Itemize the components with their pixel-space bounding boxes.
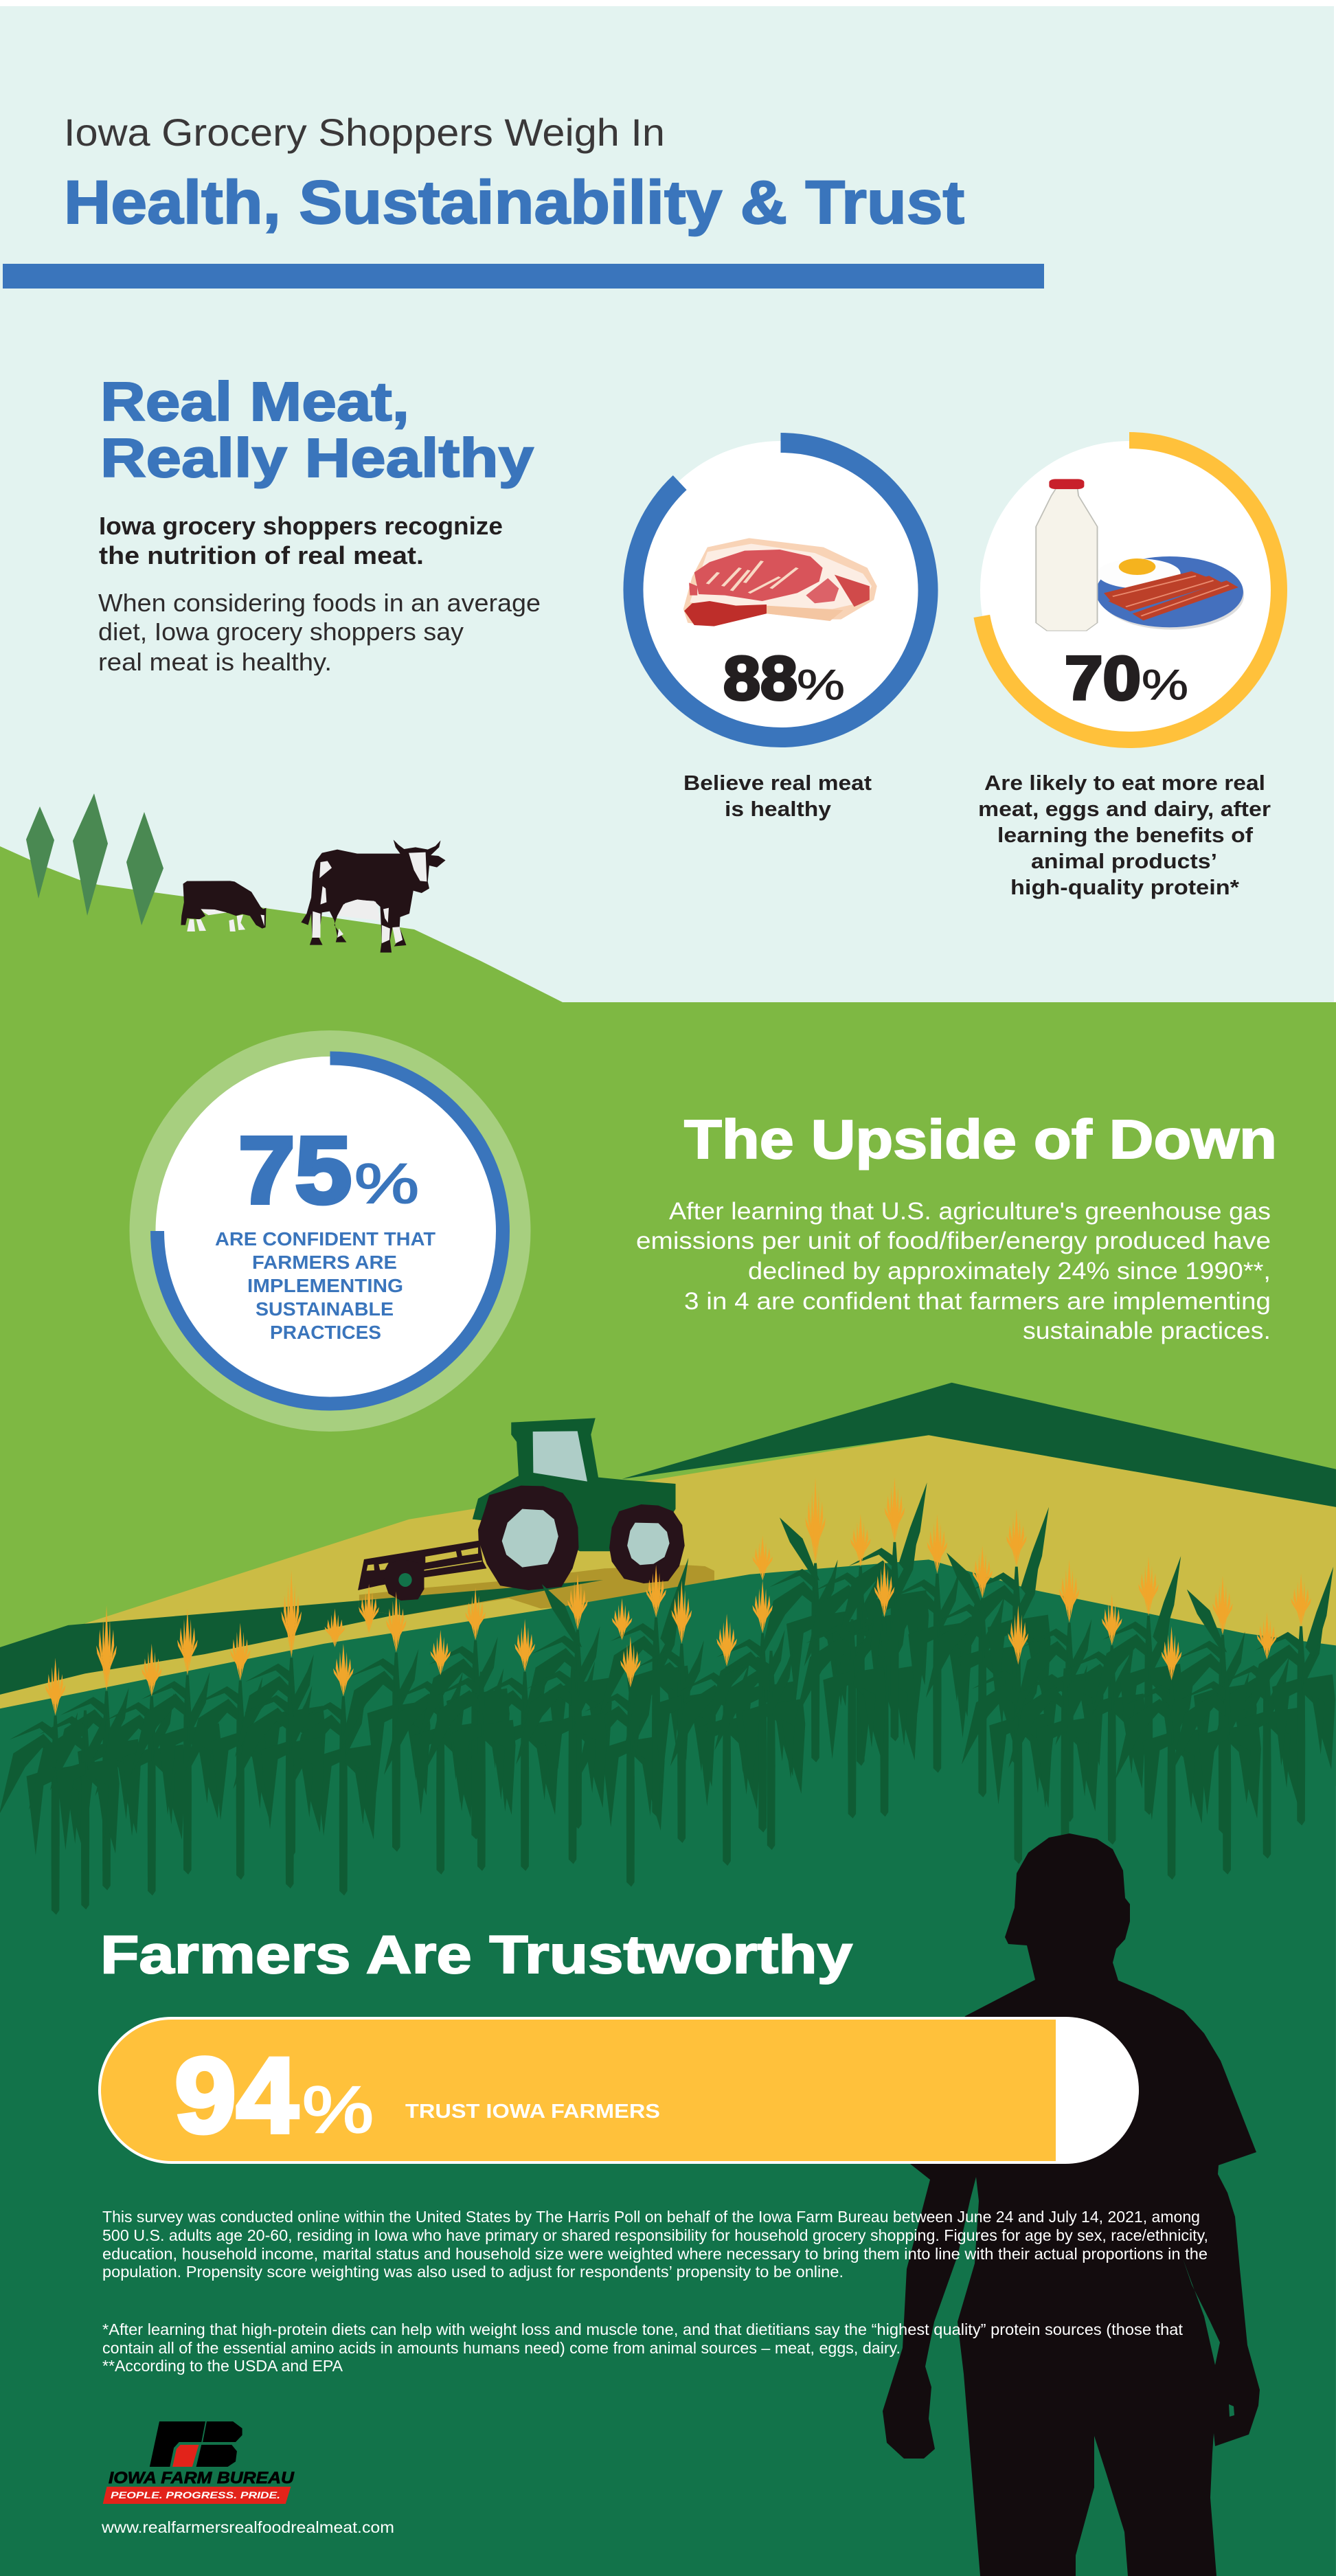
farm landscape: foreground hill: [0, 1559, 1336, 2576]
value: 75 percent: 75: [238, 1118, 352, 1223]
value: 94 percent: 94: [174, 2036, 298, 2156]
panel: the upside of down text: [636, 1109, 1277, 1344]
farm landscape: fields: [0, 1383, 1336, 1759]
paragraph: declined by approximately 24% since 1990**,: [748, 1258, 1271, 1285]
title rule: [3, 264, 1044, 289]
caption: 75 percent: [215, 1228, 435, 1343]
heading: real meat: Real Meat,: [100, 371, 409, 432]
rear wheel: [478, 1486, 578, 1590]
value: 88 percent: %: [797, 662, 845, 709]
value: 88 percent: 88: [723, 644, 797, 713]
ring: 88 percent: [632, 441, 930, 739]
body copy: real meat is healthy.: [98, 648, 332, 676]
value: 70 percent: 70: [1065, 644, 1141, 713]
bar fill: [101, 2020, 1056, 2161]
stat: 88 percent: [632, 441, 930, 821]
heading: real meat: [100, 371, 534, 488]
caption: 75 percent: ARE CONFIDENT THAT: [215, 1228, 435, 1250]
hill with trees: [0, 793, 1336, 1786]
title: kicker: Iowa Grocery Shoppers Weigh In: [64, 111, 665, 154]
caption: 75 percent: FARMERS ARE: [252, 1252, 397, 1273]
paragraph: After learning that U.S. agriculture's greenhouse gas: [669, 1198, 1271, 1225]
trailer: [358, 1541, 487, 1601]
front wheel: [609, 1504, 685, 1583]
footnotes: **According to the USDA and EPA: [102, 2357, 343, 2375]
footnotes: *After learning that high-protein diets can help with weight loss and muscle tone, and that dietitians say the “highest quality” protein sources (those that: [102, 2320, 1184, 2338]
corn field: [0, 1482, 1335, 1914]
survey methodology text: population. Propensity score weighting was also used to adjust for respondents’ propensity to be online.: [102, 2263, 844, 2281]
value: 94 percent: %: [302, 2073, 374, 2147]
icon: small grazing cow: [181, 881, 266, 931]
bold intro: the nutrition of real meat.: [99, 541, 424, 569]
tractor window: [533, 1431, 587, 1482]
survey methodology text: 500 U.S. adults age 20-60, residing in Iowa who have primary or shared responsibility for household grocery shopping. Figures for age by sex, race/ethnicity,: [102, 2226, 1208, 2244]
heading: farmers are trustworthy: Farmers Are Trustworthy: [100, 1924, 852, 1985]
header: [3, 111, 1044, 289]
caption: 88 percent: is healthy: [725, 797, 832, 821]
bold intro: Iowa grocery shoppers recognize: [99, 512, 503, 540]
logo tagline: PEOPLE. PROGRESS. PRIDE.: [111, 2489, 280, 2500]
caption: 70 percent: [978, 771, 1271, 899]
footnotes: [102, 2320, 1184, 2375]
tractor body: [473, 1418, 676, 1551]
heading: the upside of down: The Upside of Down: [684, 1109, 1277, 1170]
title: main: Health, Sustainability & Trust: [64, 168, 964, 236]
paragraph: [636, 1198, 1271, 1344]
value: 88 percent: [723, 644, 845, 713]
tractor: [358, 1418, 714, 1616]
icon: standing cow: [301, 839, 446, 953]
bar label: TRUST IOWA FARMERS: [405, 2101, 660, 2123]
farmer silhouette: [883, 1833, 1260, 2576]
caption: 75 percent: IMPLEMENTING: [247, 1275, 403, 1296]
icon: milk, egg and bacon: [1036, 479, 1244, 631]
tractor shadow: [359, 1565, 714, 1616]
heading: real meat: Really Healthy: [100, 427, 534, 488]
survey methodology text: education, household income, marital status and household size were weighted where necessary to bring them into line with their actual proportions in the: [102, 2245, 1208, 2263]
value: 94 percent: [174, 2036, 374, 2156]
value: 70 percent: [1065, 644, 1188, 713]
website url: www.realfarmersrealfoodrealmeat.com: [101, 2518, 394, 2536]
logo mark: [103, 2421, 291, 2504]
stat: 70 percent: [978, 440, 1279, 899]
paragraph: sustainable practices.: [1023, 1318, 1271, 1344]
caption: 70 percent: learning the benefits of: [997, 823, 1254, 847]
caption: 88 percent: Believe real meat: [683, 771, 872, 795]
survey methodology text: This survey was conducted online within the United States by The Harris Poll on behalf of the Iowa Farm Bureau between June 24 and July 14, 2021, among: [102, 2208, 1200, 2226]
stat: 75 percent: [129, 1030, 530, 1432]
value: 75 percent: %: [354, 1153, 419, 1215]
caption: 75 percent: SUSTAINABLE: [256, 1298, 394, 1320]
caption: 70 percent: Are likely to eat more real: [984, 771, 1265, 795]
caption: 70 percent: meat, eggs and dairy, after: [978, 797, 1271, 821]
logo wordmark: IOWA FARM BUREAU: [109, 2469, 295, 2487]
caption: 88 percent: [683, 771, 872, 821]
body copy: When considering foods in an average: [98, 589, 541, 617]
icon: meat: [683, 538, 877, 626]
caption: 70 percent: animal products’: [1031, 849, 1217, 873]
corn tassels: [45, 1477, 1311, 1715]
ring: 70 percent: [980, 440, 1279, 740]
survey methodology text: [102, 2208, 1208, 2281]
bar track: [98, 2017, 1139, 2164]
body copy: [98, 589, 541, 676]
caption: 70 percent: high-quality protein*: [1010, 875, 1240, 899]
panel: real meat intro text: [98, 371, 541, 676]
stat: 94 percent bar: [98, 2017, 1139, 2164]
bold intro: [99, 512, 503, 569]
ring: 75 percent: [129, 1030, 530, 1432]
value: 70 percent: %: [1142, 662, 1188, 709]
logo: iowa farm bureau: [103, 2421, 295, 2504]
paragraph: 3 in 4 are confident that farmers are implementing: [684, 1288, 1271, 1315]
value: 75 percent: [238, 1118, 419, 1223]
body copy: diet, Iowa grocery shoppers say: [98, 618, 464, 646]
trees: [26, 793, 163, 925]
page background: [0, 6, 1334, 1009]
paragraph: emissions per unit of food/fiber/energy produced have: [636, 1228, 1271, 1254]
footnotes: contain all of the essential amino acids in amounts humans need) come from animal sources – meat, eggs, dairy.: [102, 2339, 901, 2357]
caption: 75 percent: PRACTICES: [270, 1322, 381, 1343]
